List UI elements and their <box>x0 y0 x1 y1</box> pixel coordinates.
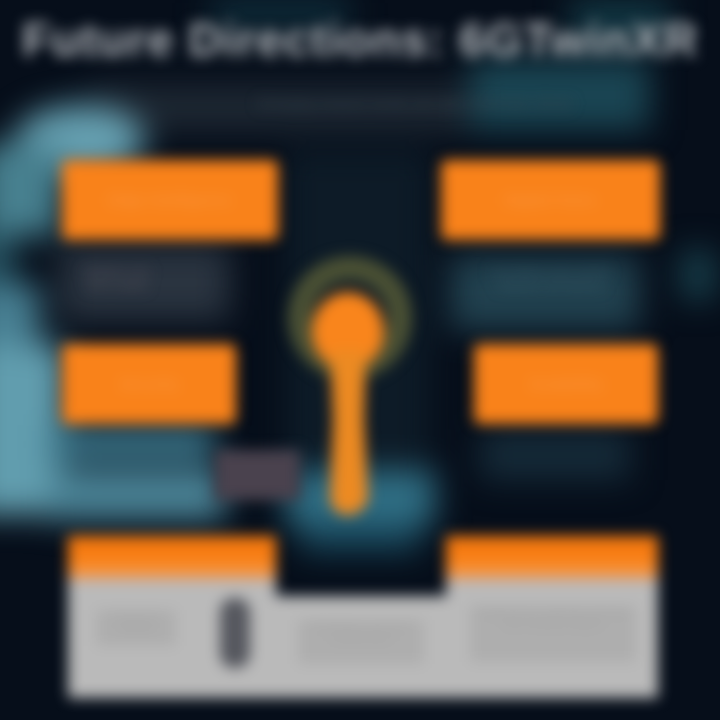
halo ring <box>288 256 412 380</box>
card text <box>470 606 636 662</box>
note: right: Low latency sync across networks and devices <box>490 266 610 292</box>
top right haze <box>470 60 650 130</box>
top centre haze <box>210 0 350 25</box>
callout: middle right <box>474 344 658 424</box>
right mid dim panel <box>450 255 640 330</box>
panel: bottom left card <box>68 536 276 698</box>
callout: top right <box>441 160 660 240</box>
panel: bottom centre card <box>276 596 446 698</box>
small swatch: lower centre left <box>215 450 300 500</box>
card text: Standards and open collaboration <box>311 620 411 645</box>
callout: middle left <box>62 344 236 424</box>
note: left: Adaptive real-time models <box>84 266 151 292</box>
card text <box>96 610 176 646</box>
figure silhouette <box>220 598 250 668</box>
title: Future Directions: 6GTwinXR <box>22 13 698 66</box>
callout: top left <box>62 160 278 240</box>
card text <box>298 620 424 664</box>
panel: bottom right card <box>446 536 658 698</box>
bottom centre glow <box>285 470 435 525</box>
card text: Research outlook <box>112 610 160 635</box>
left teal wave upper <box>15 105 145 175</box>
subtitle: Emerging research trends and open challenges ahead <box>259 96 571 111</box>
callout: top left: Edge Intelligence <box>108 192 232 208</box>
centre haze <box>285 150 430 480</box>
stem <box>319 354 378 526</box>
left mid dim mass <box>60 245 230 320</box>
node head <box>312 292 384 370</box>
callout: top right: Digital Twins <box>505 192 596 208</box>
callout: middle left: Security <box>119 376 179 392</box>
card header <box>446 536 658 580</box>
far right glow <box>680 250 716 300</box>
card text: Deployment roadmap and long term industry impact <box>478 606 628 631</box>
icon: central key-shaped node with halo <box>281 249 419 526</box>
left teal wave lower <box>0 345 65 515</box>
callout: middle right: Scalability <box>529 376 603 392</box>
band behind subtitle <box>90 85 470 130</box>
card header <box>68 536 276 580</box>
